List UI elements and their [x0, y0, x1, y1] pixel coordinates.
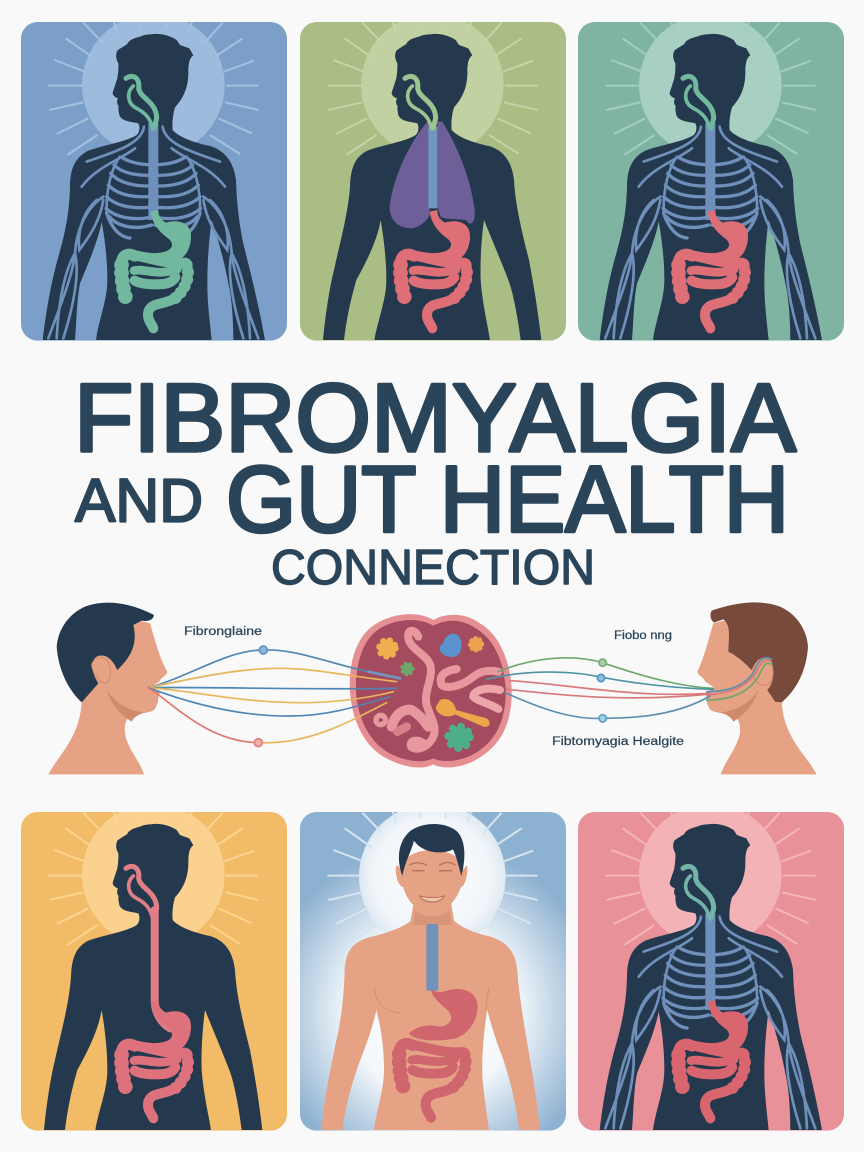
throat tube [426, 924, 438, 991]
label right bottom: Fibtomyagia Healgite [552, 736, 684, 748]
hair [399, 824, 464, 876]
title: GUT HEALTH [226, 446, 789, 552]
skin body [322, 900, 540, 1130]
panel: blue silhouette with green gut [21, 14, 287, 341]
panel: teal silhouette with pink gut [578, 14, 844, 341]
throat tube [126, 866, 170, 1028]
gut [400, 210, 470, 328]
title: CONNECTION [271, 541, 595, 595]
gut [678, 210, 748, 328]
lungs [390, 122, 475, 228]
silhouette [600, 34, 822, 340]
face [410, 862, 455, 902]
silhouette [43, 34, 265, 340]
silhouette [323, 34, 541, 340]
gut cross-section organ [350, 614, 512, 767]
panel: pink silhouette with skeleton [578, 804, 844, 1131]
title [74, 365, 797, 595]
label left: Fibronglaine [184, 626, 262, 638]
gut [678, 1000, 748, 1118]
windpipe [428, 127, 437, 208]
throat tube [683, 866, 714, 918]
throat tube [683, 76, 714, 128]
gut [121, 210, 191, 328]
throat tube [405, 76, 436, 128]
left head profile [48, 603, 167, 774]
throat tube [126, 76, 157, 128]
skeleton and vessels [605, 913, 815, 1128]
skeleton and vessels [605, 123, 815, 338]
panel: healthy person [300, 803, 566, 1131]
panel: green silhouette with lungs [300, 14, 566, 341]
title: AND [75, 466, 203, 534]
connecting nerve lines, right [487, 658, 772, 722]
stomach [409, 989, 478, 1040]
connecting nerve lines, left [148, 646, 400, 747]
gut [121, 1000, 191, 1118]
silhouette [44, 824, 262, 1130]
right head profile [697, 602, 817, 774]
silhouette [600, 824, 822, 1130]
intestines [399, 1044, 466, 1118]
intestine coils [376, 631, 500, 749]
panel: yellow silhouette with pink digestive tract [21, 804, 287, 1131]
neck shadow [413, 910, 452, 925]
head [396, 850, 468, 905]
microbes [379, 640, 395, 656]
title: FIBROMYALGIA [74, 365, 797, 472]
label right top: Fiobo nng [614, 630, 672, 642]
chest contours [374, 987, 489, 1013]
skeleton and vessels [48, 123, 258, 338]
